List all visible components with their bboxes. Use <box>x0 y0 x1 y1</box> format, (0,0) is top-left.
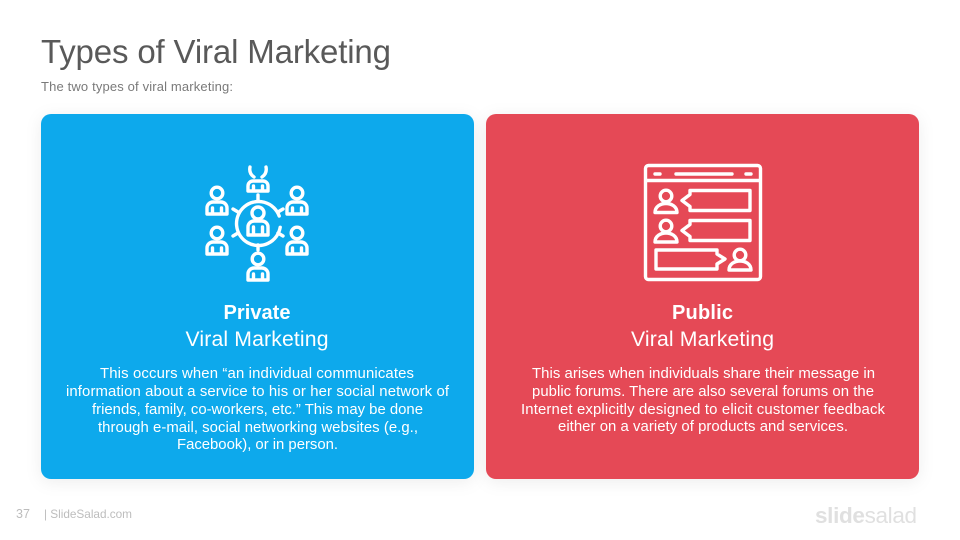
text block: private description: This occurs when “an individual communicates <box>100 366 414 382</box>
text block: public description: Internet explicitly designed to elicit customer feedback <box>521 402 886 418</box>
text block: private description: friends, family, co-workers, etc.” This may be done <box>92 402 423 418</box>
card background: public <box>486 114 919 479</box>
logo: slidesalad: slidesalad <box>815 503 917 528</box>
text block: private description <box>66 366 450 453</box>
subtitle: The two types of viral marketing: <box>41 79 233 94</box>
heading: private: Private <box>224 302 290 324</box>
heading: viral marketing: Viral Marketing <box>631 328 774 351</box>
heading: public: Public <box>672 302 733 324</box>
text block: public description <box>521 366 886 435</box>
icon: network of people <box>207 167 307 280</box>
card background: private <box>41 114 474 479</box>
text block: private description: through e-mail, social networking websites (e.g., <box>98 420 418 436</box>
heading: viral marketing: Viral Marketing <box>186 328 328 351</box>
text block: private description: information about a service to his or her social network of <box>66 384 450 400</box>
page number: 37 <box>16 507 30 521</box>
title: Types of Viral Marketing <box>41 33 391 70</box>
text block: private description: Facebook), or in person. <box>177 437 338 453</box>
text block: public description: This arises when individuals share their message in <box>532 366 875 382</box>
footer source: | SlideSalad.com <box>44 507 132 521</box>
icon: forum browser window <box>646 166 760 280</box>
panel: public viral marketing <box>486 114 919 479</box>
panel: private viral marketing <box>41 114 474 479</box>
text block: public description: public forums. There are also several forums on the <box>532 384 874 400</box>
text block: public description: either on a variety of products and services. <box>558 419 848 435</box>
